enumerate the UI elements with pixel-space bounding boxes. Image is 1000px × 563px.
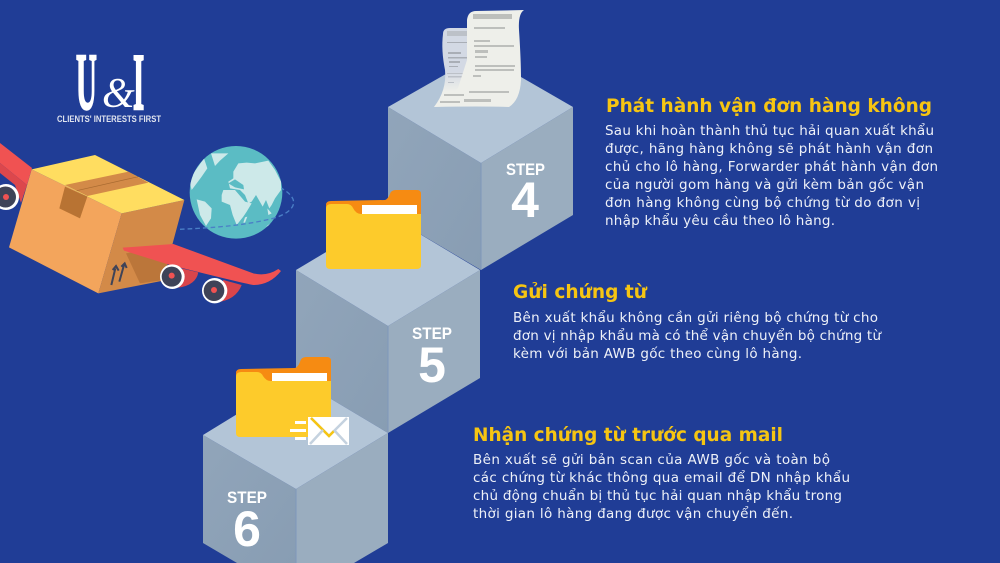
step 4 label: STEP (506, 161, 545, 179)
step 6 number: 6 (233, 501, 261, 557)
body: step 5: kèm với bản AWB gốc theo cùng lô hàng. (513, 345, 802, 362)
left wing (0, 143, 32, 210)
icon: paper documents (434, 10, 524, 107)
right wing (123, 244, 281, 303)
body: step 6 (473, 451, 850, 522)
body: step 6: Bên xuất sẽ gửi bản scan của AWB gốc và toàn bộ (473, 451, 830, 468)
logo: U&I (57, 38, 161, 128)
logo tagline: CLIENTS' INTERESTS FIRST (57, 114, 161, 125)
step 5 number: 5 (418, 337, 446, 393)
cube: step 5 (296, 215, 480, 433)
logo: U&I: U (76, 38, 97, 128)
body: step 4: được, hãng hàng không sẽ phát hành vận đơn (605, 141, 933, 157)
body: step 4: đơn hàng không cùng bộ chứng từ do đơn vị (605, 195, 920, 211)
body: step 4: Sau khi hoàn thành thủ tục hải quan xuất khẩu (605, 122, 934, 139)
text block: step 6 (473, 424, 850, 522)
body: step 5 (513, 309, 882, 362)
cube: step 4 (388, 54, 573, 270)
body: step 6: thời gian lô hàng đang được vận chuyển đến. (473, 505, 793, 522)
body: step 5: Bên xuất khẩu không cần gửi riêng bộ chứng từ cho (513, 309, 878, 326)
body: step 4: của người gom hàng và gửi kèm bản gốc vận (605, 176, 924, 193)
text block: step 4 (605, 95, 938, 229)
body: step 6: chủ động chuẩn bị thủ tục hải quan nhập khẩu trong (473, 487, 842, 504)
icon: envelope (290, 417, 349, 445)
step 6 label: STEP (227, 489, 267, 507)
illustration: parcel with wings (0, 143, 281, 303)
step 5 label: STEP (412, 325, 452, 343)
logo: U&I: I (133, 38, 144, 128)
cube: step 6 (203, 378, 388, 563)
heading: step 6: Nhận chứng từ trước qua mail (473, 424, 783, 446)
wheels (160, 264, 185, 289)
heading: step 4: Phát hành vận đơn hàng không (606, 95, 932, 117)
body: step 5: đơn vị nhập khẩu mà có thể vận chuyển bộ chứng từ (513, 327, 882, 344)
body: step 6: các chứng từ khác thông qua email để DN nhập khẩu (473, 469, 850, 486)
icon: yellow folder (326, 190, 421, 269)
flight path (180, 188, 294, 229)
step 4 number: 4 (511, 172, 539, 228)
logo: U&I: & (102, 71, 135, 117)
heading: step 5: Gửi chứng từ (513, 281, 647, 303)
text block: step 5 (513, 281, 882, 362)
illustration: globe (180, 146, 294, 239)
body: step 4: chủ cho lô hàng, Forwarder phát hành vận đơn (605, 159, 938, 175)
body: step 4 (605, 122, 938, 229)
box (9, 155, 184, 293)
icon: folder with mail (236, 357, 349, 445)
body: step 4: nhập khẩu yêu cầu theo lô hàng. (605, 212, 835, 229)
